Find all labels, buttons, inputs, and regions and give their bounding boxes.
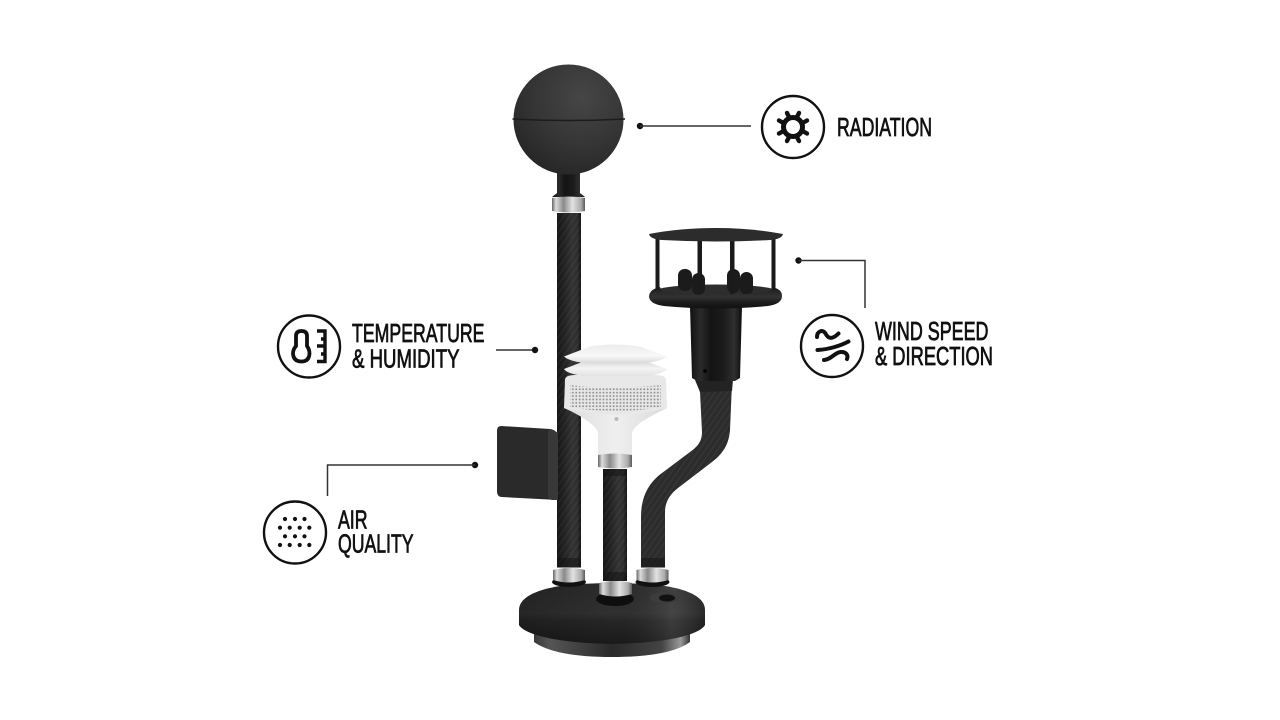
- icon: wind waves: [801, 315, 863, 377]
- icon: particles: [264, 502, 326, 564]
- leader line: radiation: [637, 123, 751, 129]
- lower louvre: [564, 362, 667, 376]
- label: radiation: RADIATION: [837, 112, 932, 142]
- sensor station product illustration: [497, 64, 783, 657]
- callout: air quality: [264, 462, 478, 564]
- label: temperature and humidity: [352, 318, 484, 374]
- globe neck: [552, 172, 585, 197]
- label: temperature and humidity: & HUMIDITY: [352, 344, 460, 374]
- icon: thermometer: [278, 316, 340, 378]
- anemometer transducers: [678, 269, 753, 295]
- white radiation shield sensor: [564, 344, 667, 456]
- label: air quality: [338, 504, 414, 558]
- top louvre cap: [564, 344, 667, 364]
- radiation globe sphere: [512, 64, 625, 174]
- base port: [650, 592, 680, 603]
- centre pole: [603, 469, 627, 581]
- centre collar: [598, 454, 632, 468]
- centre foot collar: [599, 581, 632, 596]
- callout: temperature and humidity: [278, 316, 538, 378]
- air quality box: [497, 426, 558, 500]
- main pole: [557, 213, 581, 568]
- label: wind speed and direction: WIND SPEED: [875, 316, 988, 346]
- bent carbon pole: [641, 380, 733, 568]
- base puck: [519, 583, 705, 644]
- label: air quality: QUALITY: [338, 528, 414, 558]
- centre socket: [596, 592, 634, 606]
- label: wind speed and direction: & DIRECTION: [875, 341, 993, 371]
- globe collar: [552, 196, 585, 212]
- anemometer rim: [649, 287, 782, 308]
- callout: wind speed and direction: [795, 257, 993, 377]
- sensor mesh body: [564, 375, 667, 415]
- label: air quality: AIR: [338, 504, 368, 534]
- leader line: air quality: [328, 462, 478, 496]
- sensor neck: [564, 408, 667, 456]
- leader line: wind: [795, 257, 865, 308]
- left foot collar: [552, 568, 586, 587]
- sensor small screw: [614, 417, 618, 421]
- wind sensor housing: [690, 306, 742, 381]
- anemometer top disc: [649, 228, 783, 242]
- icon: gear sun: [762, 96, 824, 158]
- base underside: [534, 634, 690, 657]
- leader line: temperature: [496, 347, 538, 353]
- label: temperature and humidity: TEMPERATURE: [352, 318, 484, 348]
- right foot collar: [636, 568, 670, 587]
- anemometer lower plate: [656, 284, 776, 298]
- anemometer posts: [656, 238, 776, 294]
- label: wind speed and direction: [875, 316, 993, 371]
- callout: radiation: [637, 96, 932, 158]
